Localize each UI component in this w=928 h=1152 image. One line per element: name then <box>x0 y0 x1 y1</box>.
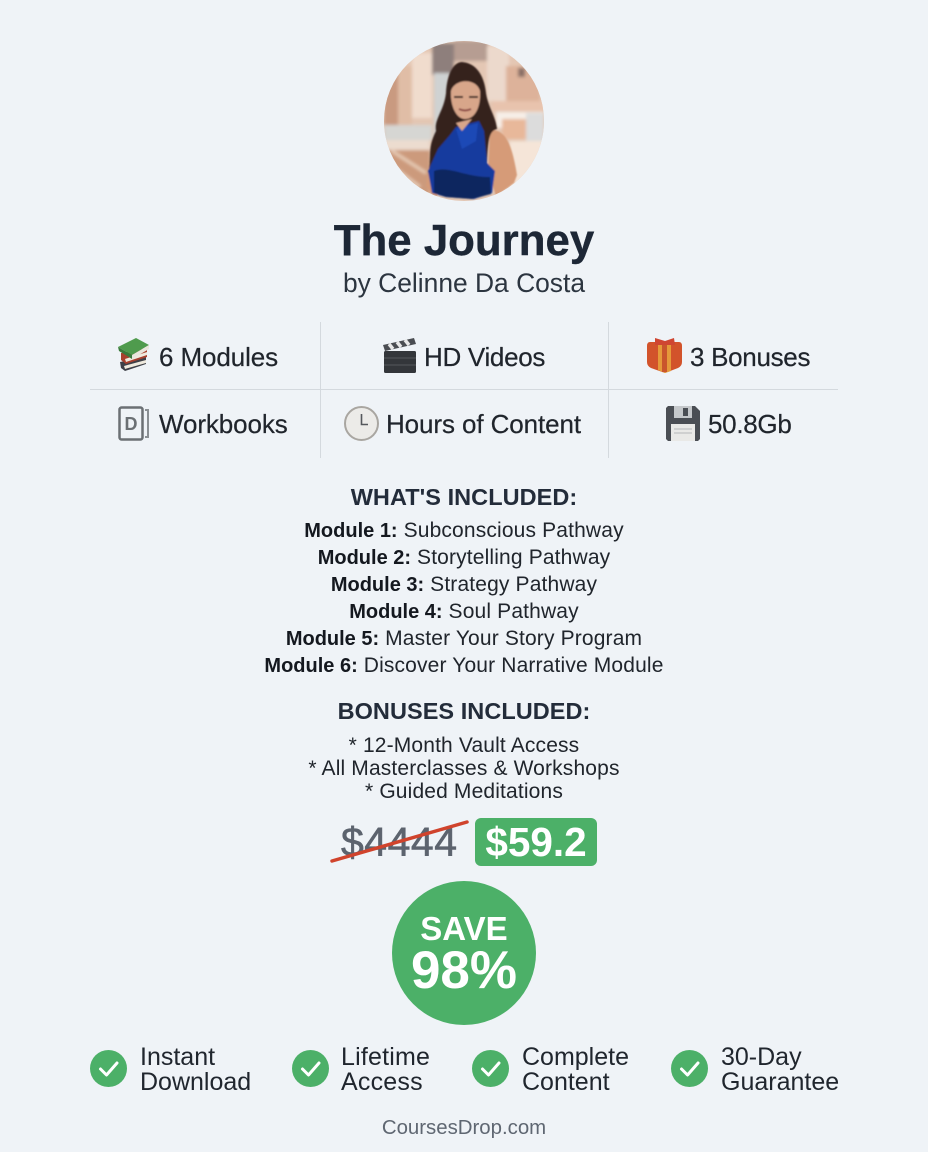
bonus list <box>308 734 620 803</box>
guarantee: instant download <box>90 1043 251 1096</box>
save badge: SAVE <box>420 910 508 947</box>
feature: HD Videos <box>383 338 545 373</box>
guarantee: lifetime access: Lifetime <box>341 1043 430 1071</box>
heading: what's included: WHAT'S INCLUDED: <box>351 484 577 510</box>
guarantee: instant download: Instant <box>140 1043 215 1071</box>
feature: HD Videos: HD Videos <box>424 342 545 372</box>
feature: Workbooks <box>118 406 288 441</box>
feature: 3 Bonuses <box>647 338 810 373</box>
module list: Module 4: Soul Pathway <box>349 600 579 623</box>
subtitle: by Celinne Da Costa <box>343 268 585 298</box>
feature: Workbooks: Workbooks <box>159 409 288 439</box>
feature: Workbooks: D <box>124 414 138 434</box>
save badge: 98% <box>411 941 517 1000</box>
guarantee: complete content <box>472 1043 629 1096</box>
feature: 50.8Gb: 50.8Gb <box>708 409 792 439</box>
module list: Module 6: Discover Your Narrative Module <box>264 654 664 677</box>
guarantee: complete content: Complete <box>522 1043 629 1071</box>
module list: Module 5: Master Your Story Program <box>286 627 642 650</box>
feature: Hours of Content: Hours of Content <box>386 409 581 439</box>
guarantee: 30-day guarantee <box>671 1043 839 1096</box>
guarantee: 30-day guarantee: 30-Day <box>721 1043 802 1071</box>
bonus list: * All Masterclasses & Workshops <box>308 757 620 780</box>
footer: CoursesDrop.com <box>382 1117 546 1139</box>
module list: Module 2: Storytelling Pathway <box>318 546 610 569</box>
guarantee: lifetime access <box>292 1043 430 1096</box>
module list: Module 3: Strategy Pathway <box>331 573 597 596</box>
portrait photo <box>384 41 544 201</box>
feature: 3 Bonuses: 3 Bonuses <box>690 342 810 372</box>
feature: 50.8Gb <box>666 406 792 441</box>
old price struck through: $4444 <box>341 819 458 865</box>
bonus list: * 12-Month Vault Access <box>349 734 579 757</box>
feature: 6 Modules: 6 Modules <box>159 342 278 372</box>
guarantee: lifetime access: Access <box>341 1068 423 1096</box>
bonus list: * Guided Meditations <box>365 780 563 803</box>
guarantee: instant download: Download <box>140 1068 251 1096</box>
save badge <box>392 881 536 1025</box>
heading: bonuses included: BONUSES INCLUDED: <box>338 698 590 724</box>
module list <box>264 519 664 677</box>
title: The Journey <box>334 216 594 265</box>
guarantee: 30-day guarantee: Guarantee <box>721 1068 839 1096</box>
module list: Module 1: Subconscious Pathway <box>304 519 624 542</box>
new price badge: $59.2 <box>485 819 587 865</box>
guarantee: complete content: Content <box>522 1068 610 1096</box>
feature: 6 Modules <box>118 338 278 372</box>
feature grid <box>90 322 838 458</box>
